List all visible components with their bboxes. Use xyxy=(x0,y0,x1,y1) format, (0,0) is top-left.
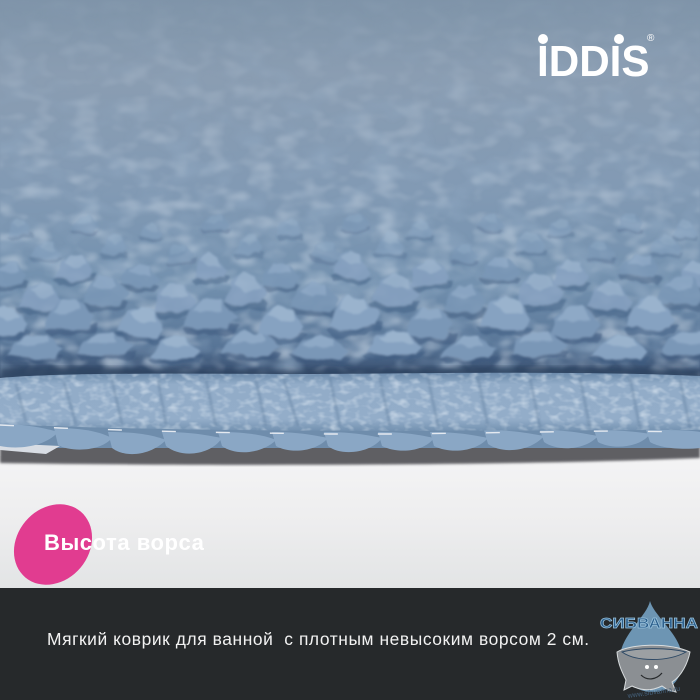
description text: Мягкий коврик для ванной с плотным невысоким ворсом 2 см. xyxy=(47,629,590,649)
binding band xyxy=(0,373,700,431)
pink blob badge xyxy=(14,504,92,585)
logo dot left xyxy=(538,34,548,44)
registered mark: ® xyxy=(647,33,654,44)
heading: pile height: Высота ворса xyxy=(44,530,204,555)
logo wordmark: IDDIS xyxy=(537,38,650,86)
water drop xyxy=(620,601,682,692)
pile surface xyxy=(0,0,700,378)
floor xyxy=(0,456,700,590)
footer bar xyxy=(0,588,700,700)
watermark url: www.sibvanna.ru xyxy=(626,686,681,700)
logo: iddis xyxy=(537,33,654,86)
watermark word: СИБВАННА xyxy=(600,615,698,632)
pile tufts xyxy=(0,212,700,365)
lower stitch row xyxy=(0,424,700,454)
shadow under mat xyxy=(0,444,700,465)
underside base of stitches xyxy=(0,424,700,448)
dark crease between pile and binding xyxy=(0,367,700,384)
watermark logo: Sibvanna xyxy=(600,601,698,700)
bathtub xyxy=(617,645,690,692)
logo dot right xyxy=(614,34,624,44)
white thread along stitches xyxy=(0,425,700,434)
white underside sliver xyxy=(0,443,60,454)
